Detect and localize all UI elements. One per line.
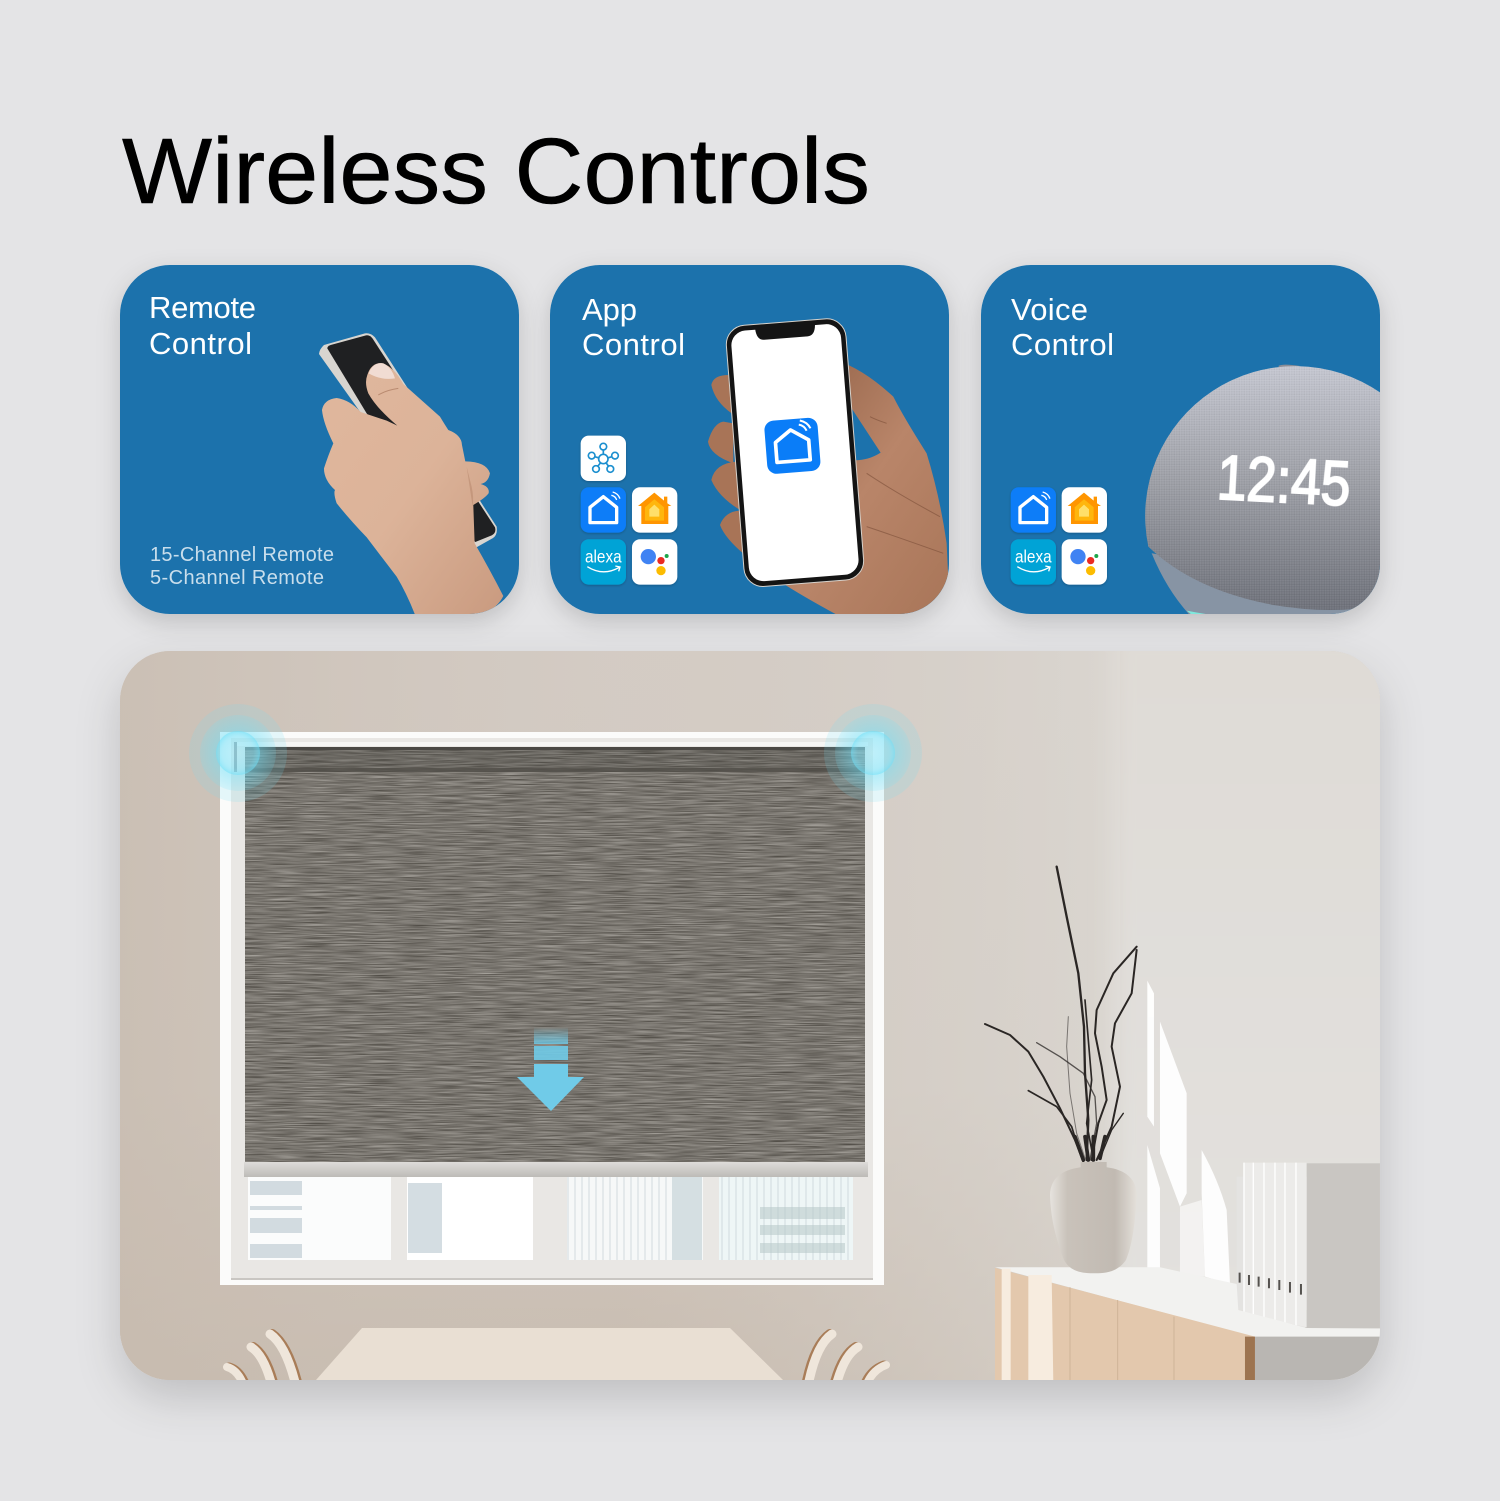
- icon: smart life: [1011, 487, 1056, 533]
- illustration: hand holding phone: [708, 317, 950, 615]
- icon: alexa: alexa: [1015, 547, 1052, 567]
- heading: voice control: Control: [1011, 327, 1114, 362]
- remote channel list: 5-Channel Remote: [150, 567, 324, 589]
- room walls: [120, 630, 1412, 1400]
- branches: [985, 867, 1137, 1162]
- chairs: right: [806, 1334, 886, 1386]
- right side still life: [985, 867, 1380, 1383]
- illustration: hand holding remote: [319, 333, 503, 615]
- heading: voice control: Voice: [1011, 292, 1088, 327]
- window frame: [220, 732, 884, 1285]
- icon: apple home: [632, 487, 677, 533]
- illustration: smart speaker with clock: [1145, 365, 1381, 616]
- clock readout: 12:45: [1216, 443, 1352, 520]
- sunlight patches: [1147, 981, 1230, 1284]
- city view panes: [248, 1177, 853, 1260]
- shade bottom bar: [244, 1162, 868, 1177]
- icon: apple home: [1062, 487, 1107, 533]
- title: Wireless Controls: [122, 119, 870, 223]
- icon: smart hub: [581, 436, 626, 481]
- vase: [1050, 1162, 1137, 1273]
- icon: google assistant: [632, 539, 677, 585]
- panel: app control: [550, 265, 950, 615]
- panel: remote control: [120, 265, 519, 615]
- panel: room scene with roller shade: [120, 630, 1412, 1400]
- app icons: voice card: [1011, 487, 1107, 585]
- phone screen: [730, 323, 860, 582]
- icon: smart life: [581, 487, 626, 533]
- app icon on phone: [764, 417, 821, 475]
- panel: voice control: [981, 265, 1381, 616]
- signal: left corner: [189, 704, 287, 802]
- signal: right corner: [824, 704, 922, 802]
- roller shade fabric: [245, 747, 865, 1163]
- heading: app control: Control: [582, 327, 685, 362]
- shade roller band: [234, 742, 868, 772]
- remote channel list: 15-Channel Remote: [150, 544, 334, 566]
- phone notch: [755, 324, 816, 340]
- heading: remote control: Remote: [149, 290, 256, 325]
- chairs: left: [227, 1334, 298, 1386]
- app icons: app card: [581, 436, 677, 585]
- heading: app control: App: [582, 292, 637, 327]
- heading: remote control: Control: [149, 326, 252, 361]
- phone body: [725, 317, 865, 588]
- icon: alexa: alexa: [585, 547, 622, 567]
- dining table: [316, 1328, 783, 1380]
- icon: alexa: [581, 539, 626, 585]
- arrow: shade moving down: [517, 1027, 584, 1111]
- binders: [1237, 1163, 1380, 1328]
- icon: google assistant: [1062, 539, 1107, 585]
- sideboard: [995, 1267, 1380, 1383]
